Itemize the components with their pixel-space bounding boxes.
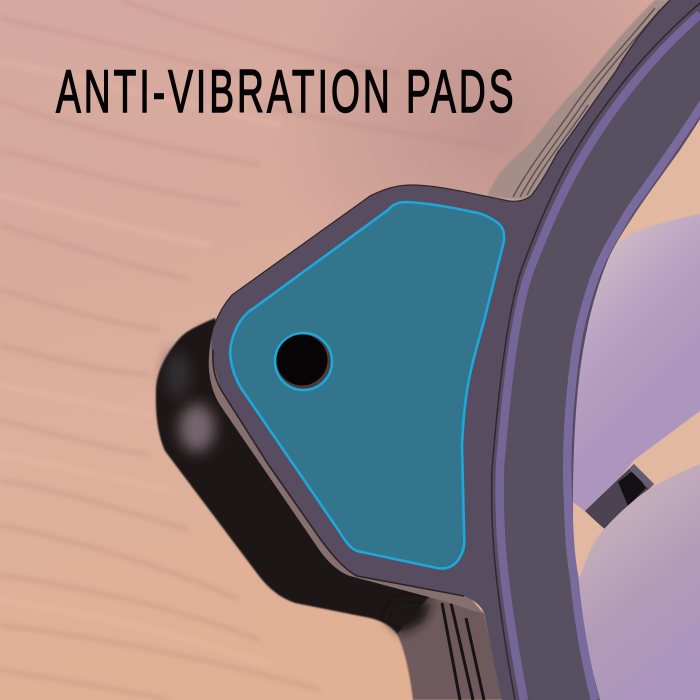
lower blade (560, 464, 700, 700)
icon: upper back frame with ridges (487, 0, 690, 200)
mounting hole (275, 333, 332, 390)
upper blade (560, 214, 700, 511)
icon: black rear fan corner (156, 318, 450, 640)
icon: fan frame (209, 0, 700, 700)
title: ANTI-VIBRATION PADS (56, 58, 514, 125)
icon: fan interior and blades (560, 60, 700, 700)
anti-vibration pad (230, 202, 504, 568)
hub arm (585, 464, 654, 531)
icon: lower back frame with ridges (385, 596, 505, 700)
